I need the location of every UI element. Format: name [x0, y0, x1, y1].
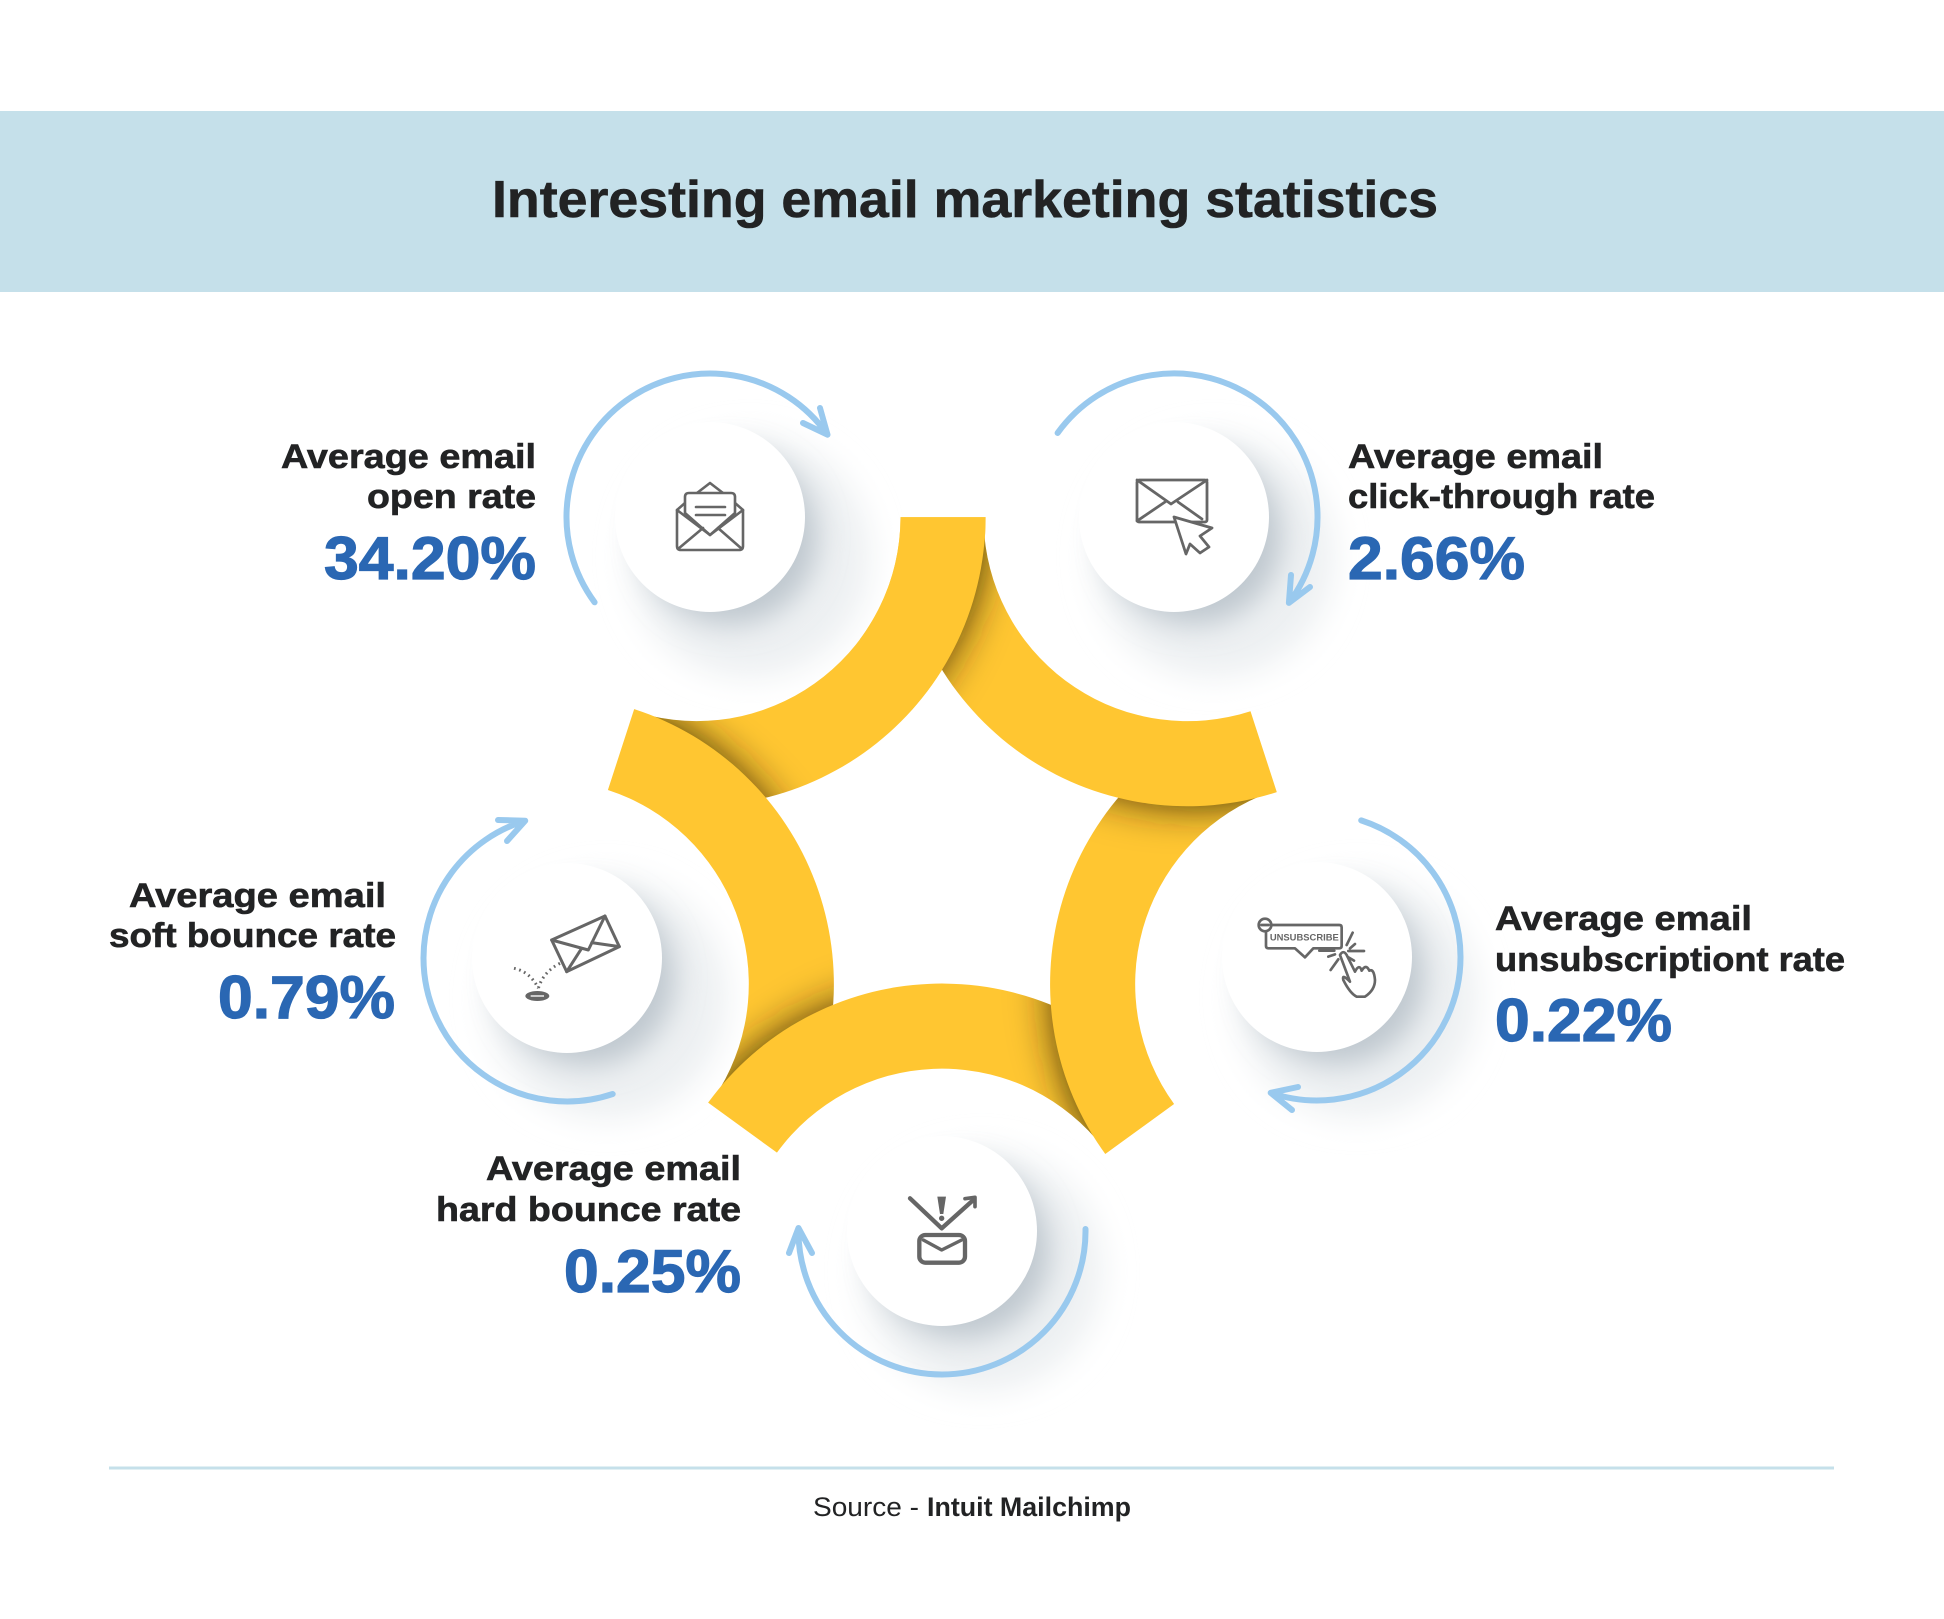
circle: [847, 1136, 1037, 1326]
header band: [0, 111, 1944, 292]
icon: bouncing envelope: [514, 916, 619, 1001]
icon: unsubscribe click: UNSUBSCRIBE: [1270, 933, 1339, 943]
text: unsubscription rate: Average email: [1495, 900, 1752, 938]
icon: open envelope: [677, 483, 743, 550]
yellow interlocking ring: [608, 517, 1277, 1154]
text: open rate: open rate: [367, 478, 536, 516]
circle shadows: [487, 437, 1477, 1391]
panel: soft bounce rate: [109, 820, 662, 1101]
arrow: [423, 820, 613, 1101]
text: click-through rate: Average email: [1348, 438, 1603, 476]
circle: [615, 422, 805, 612]
ring segment: soft bounce: [473, 698, 1184, 1325]
circle: [1079, 422, 1269, 612]
text: open rate: [281, 438, 536, 592]
panel: unsubscription rate: [1222, 820, 1845, 1110]
ring segment: unsubscription: [885, 432, 1367, 1158]
text: open rate: 34.20%: [324, 525, 536, 592]
icon: envelope with cursor: [1137, 480, 1212, 554]
text: soft bounce rate: 0.79%: [218, 964, 395, 1031]
text: soft bounce rate: Average email: [129, 877, 386, 915]
title: Interesting email marketing statistics: [492, 171, 1438, 229]
ring segment: open rate: [517, 432, 999, 1158]
circle: [472, 863, 662, 1053]
text: hard bounce rate: 0.25%: [564, 1238, 741, 1305]
panel: click-through rate: [1058, 373, 1655, 612]
text: click-through rate: [1348, 438, 1655, 592]
source note: Intuit Mailchimp: [927, 1492, 1131, 1522]
text: hard bounce rate: hard bounce rate: [436, 1191, 741, 1229]
ring segment: hard bounce: [700, 698, 1411, 1325]
panel: hard bounce rate: [436, 1136, 1086, 1374]
icon detail: exclamation mark: [937, 1197, 946, 1221]
text: hard bounce rate: [436, 1150, 741, 1305]
text: hard bounce rate: Average email: [486, 1150, 741, 1188]
icon: unsubscribe click: [1259, 919, 1375, 997]
panel: open rate: [281, 374, 828, 612]
circle: [1222, 862, 1412, 1052]
text: open rate: Average email: [281, 438, 536, 476]
source note: [813, 1492, 1131, 1522]
text: click-through rate: click-through rate: [1348, 478, 1655, 516]
text: unsubscription rate: unsubscriptiont rate: [1495, 941, 1845, 979]
ring segment: open rate overlap patch: [860, 517, 986, 710]
arrow: [567, 374, 828, 602]
arrow: [1058, 373, 1318, 603]
arrow: [789, 1228, 1086, 1374]
ring segment: click-through: [607, 517, 1277, 806]
text: click-through rate: 2.66%: [1348, 525, 1525, 592]
source note: Source -: [813, 1492, 919, 1522]
text: unsubscription rate: [1495, 900, 1845, 1054]
text: unsubscription rate: 0.22%: [1495, 987, 1672, 1054]
arrow: [1271, 820, 1460, 1110]
icon: bounced envelope: [910, 1197, 975, 1263]
text: soft bounce rate: soft bounce rate: [109, 917, 396, 955]
text: soft bounce rate: [109, 877, 396, 1031]
